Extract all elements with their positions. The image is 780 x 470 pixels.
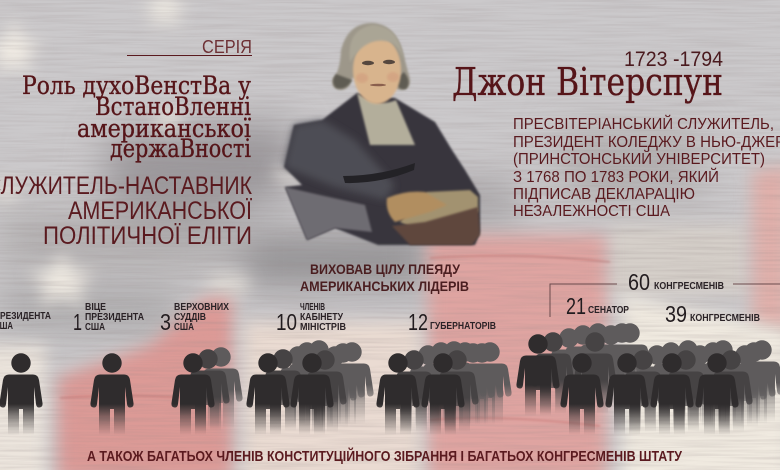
leaders heading [300, 261, 469, 294]
stat: supreme court judges: СУДДІВ [174, 312, 206, 323]
stat: 60 congressmen with bracket: 60 [628, 269, 650, 295]
stat: cabinet ministers [276, 302, 346, 335]
stat: governors [408, 309, 496, 335]
series title [22, 71, 251, 163]
life dates: 1723 -1794 [624, 48, 723, 71]
biography text: ПІДПИСАВ ДЕКЛАРАЦІЮ [513, 186, 695, 203]
people group: senators [516, 323, 652, 435]
subtitle: АМЕРИКАНСЬКОЇ [68, 197, 252, 225]
stat: 21 senators [566, 293, 629, 319]
stat: vice president: США [85, 322, 105, 333]
portrait of John Witherspoon [284, 23, 480, 245]
subtitle [0, 172, 252, 250]
stat: cabinet ministers: ЧЛЕНІВ [300, 302, 325, 313]
stat: supreme court judges: ВЕРХОВНИХ [174, 302, 229, 313]
stat: governors: ГУБЕРНАТОРІВ [430, 321, 496, 332]
series label: СЕРІЯ [202, 37, 252, 57]
stat: 39 congressmen [665, 301, 760, 327]
stat: supreme court judges: США [174, 322, 194, 333]
stat: 39 congressmen: 39 [665, 301, 687, 327]
leaders heading: ВИХОВАВ ЦІЛУ ПЛЕЯДУ [310, 261, 460, 277]
people group: congressmen [605, 340, 780, 435]
stat: presidents [0, 311, 51, 332]
series title: Роль духоВенстВа у [22, 71, 251, 100]
people group: judges [171, 347, 243, 435]
stat: cabinet ministers: КАБІНЕТУ [300, 312, 344, 323]
subtitle: ПОЛІТИЧНОЇ ЕЛІТИ [43, 222, 252, 250]
series label [127, 37, 252, 57]
series title: ВстаноВленні [95, 92, 251, 121]
stat: supreme court judges [160, 302, 229, 335]
biography text: З 1768 ПО 1783 РОКИ, ЯКИЙ [513, 167, 719, 186]
person: president [0, 353, 43, 435]
stat: cabinet ministers: МІНІСТРІВ [300, 322, 346, 333]
series title: американської [77, 114, 251, 143]
stat: 21 senators: СЕНАТОР [588, 305, 629, 316]
stat: 39 congressmen: КОНГРЕСМЕНІВ [690, 313, 760, 324]
person: vice president [90, 353, 134, 435]
stat: vice president: ПРЕЗИДЕНТА [85, 312, 144, 323]
name heading: Джон Вітерспун [452, 60, 723, 104]
stat: cabinet ministers: 10 [276, 309, 297, 335]
people group: governors [376, 341, 512, 435]
biography text [513, 114, 780, 220]
biography text: (ПРИНСТОНСЬКИЙ УНІВЕРСИТЕТ) [513, 149, 765, 168]
stat: 21 senators: 21 [566, 293, 586, 319]
stat: supreme court judges: 3 [160, 309, 171, 335]
stat: 60 congressmen with bracket: КОНГРЕСМЕНІВ [654, 281, 724, 292]
stat: 60 congressmen with bracket [550, 269, 780, 317]
biography text: НЕЗАЛЕЖНОСТІ США [513, 203, 670, 220]
stat: governors: 12 [408, 309, 428, 335]
people group: ministers [246, 340, 374, 435]
series title: держаВності [110, 134, 251, 163]
stat: vice president: ВІЦЕ [85, 302, 106, 313]
leaders heading: АМЕРИКАНСЬКИХ ЛІДЕРІВ [300, 278, 469, 294]
stat: vice president [73, 302, 144, 335]
stat: vice president: 1 [73, 309, 82, 335]
